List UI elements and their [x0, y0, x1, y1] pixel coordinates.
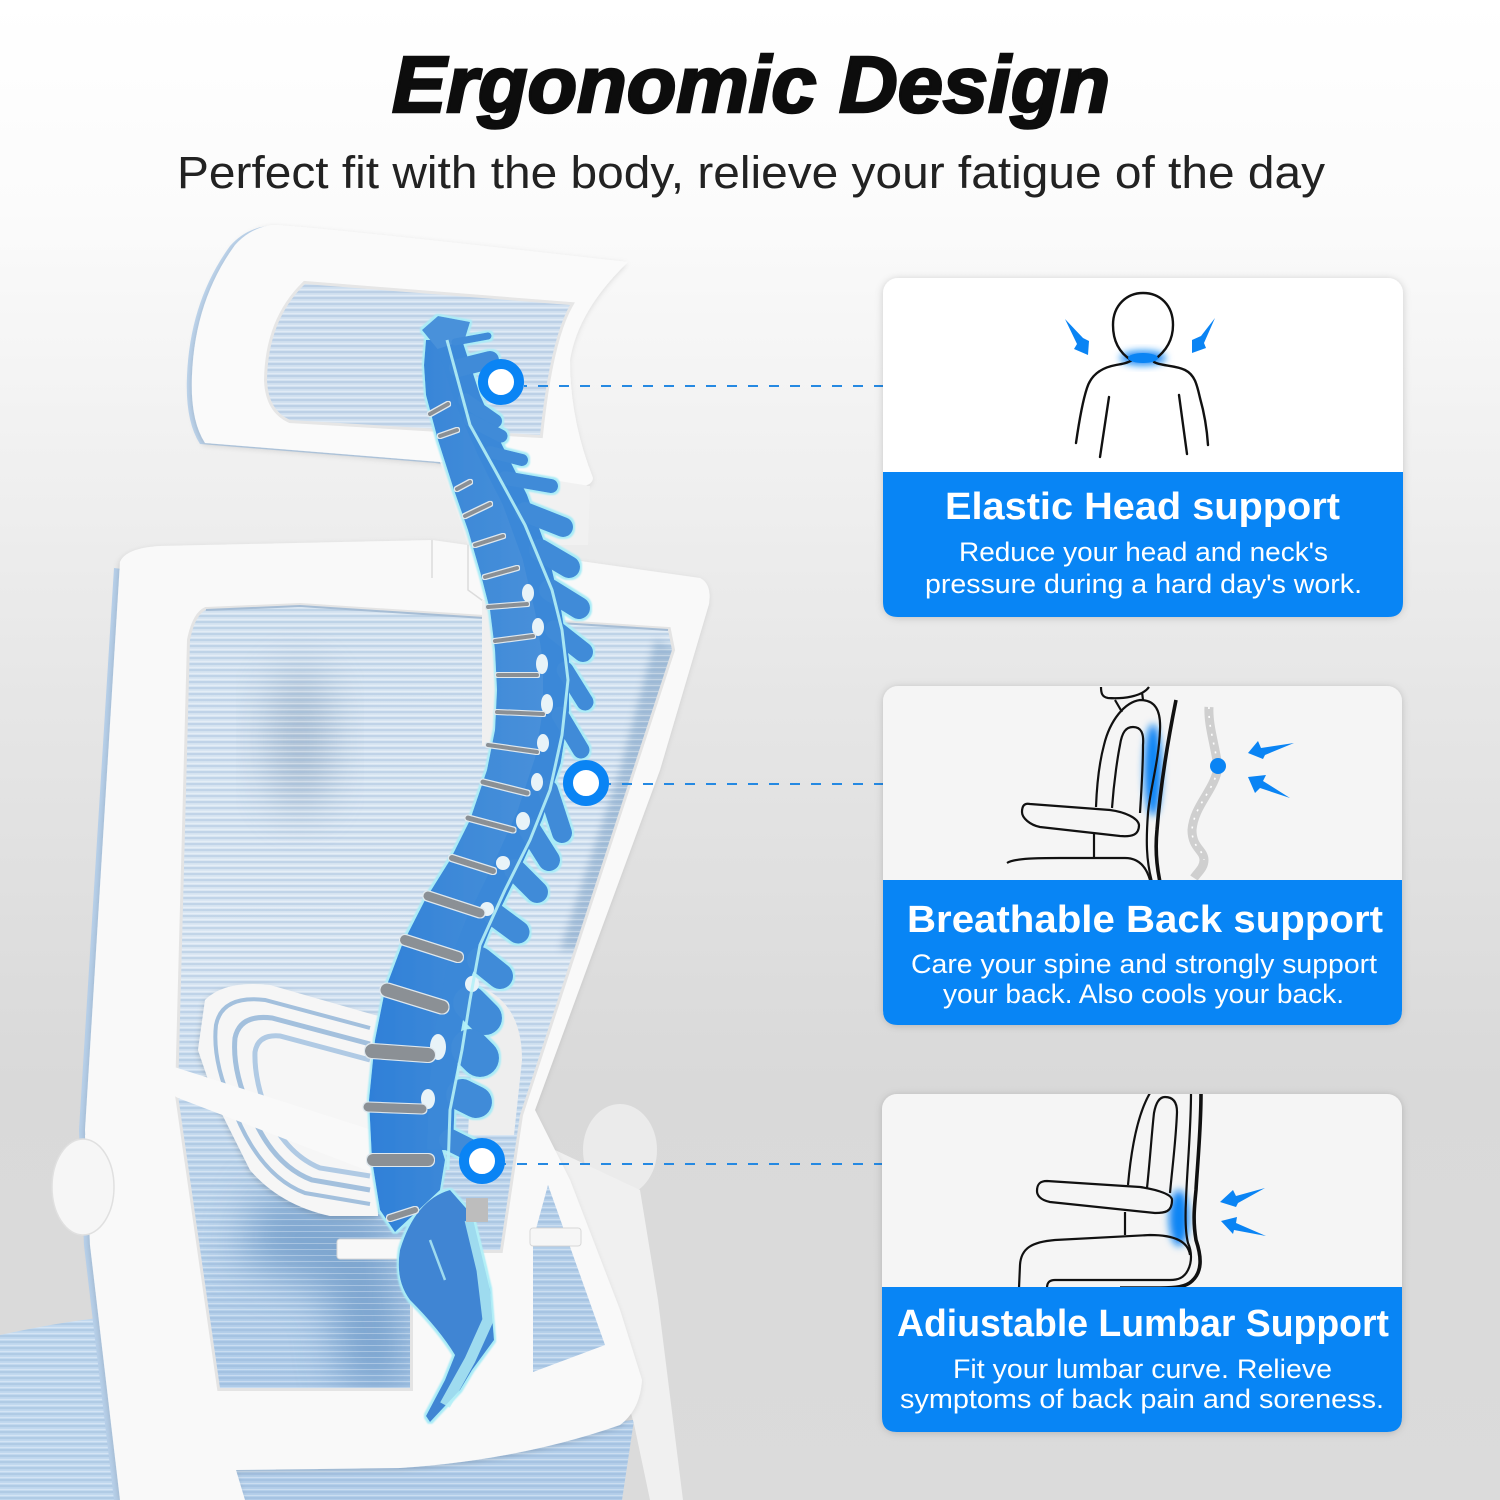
seat cushion	[0, 1318, 634, 1500]
headrest	[187, 225, 628, 545]
panel body text: symptoms of back pain and soreness.	[900, 1384, 1384, 1414]
sacral bone patch	[466, 1198, 488, 1222]
marker: lumbar	[464, 1143, 500, 1179]
spinal canal highlight	[430, 340, 568, 1405]
icon: neck pressure figure	[1065, 293, 1215, 457]
spine	[368, 316, 585, 1422]
title: Ergonomic Design	[392, 40, 1110, 129]
connector: back support	[609, 783, 884, 785]
lower right mesh panel	[533, 1185, 605, 1372]
central back struts	[468, 600, 522, 1135]
panel body text	[911, 949, 1378, 1009]
back mesh	[178, 606, 680, 1388]
facet joint highlights	[421, 584, 553, 1109]
panel body text: Care your spine and strongly support	[911, 949, 1378, 979]
pegs	[337, 1228, 581, 1259]
panel body text	[925, 537, 1362, 599]
crossbar	[146, 1058, 392, 1180]
chair with spine illustration	[0, 225, 710, 1500]
lumbar support plate	[198, 984, 378, 1216]
panel heading: Breathable Back support	[907, 899, 1383, 941]
panel body text: Reduce your head and neck's	[959, 537, 1328, 567]
panel body text: Fit your lumbar curve. Relieve	[953, 1354, 1332, 1384]
panel body text	[900, 1354, 1384, 1414]
panel heading: Elastic Head support	[945, 486, 1340, 528]
panel body text: pressure during a hard day's work.	[925, 569, 1362, 599]
panel: breathable back support	[883, 686, 1402, 1025]
rear arm and knob	[555, 1104, 683, 1500]
vertebrae and processes	[369, 316, 585, 1422]
intervertebral discs	[368, 404, 543, 1218]
connector: lumbar support	[504, 1163, 884, 1165]
backrest side mesh edge	[79, 568, 130, 1500]
backrest frame	[85, 540, 710, 1500]
panel: adjustable lumbar support	[882, 1093, 1402, 1432]
left tilt knob	[52, 1134, 150, 1245]
icon: seated lumbar outline	[1019, 1093, 1266, 1288]
panel: elastic head support	[883, 278, 1403, 617]
connector: head support	[524, 385, 884, 387]
panel heading: Adiustable Lumbar Support	[897, 1303, 1389, 1345]
icon: seated back outline	[1007, 687, 1294, 882]
subtitle: Perfect fit with the body, relieve your fatigue of the day	[177, 147, 1326, 198]
marker: back	[568, 765, 604, 801]
marker: head	[483, 364, 519, 400]
panel body text: your back. Also cools your back.	[943, 979, 1344, 1009]
